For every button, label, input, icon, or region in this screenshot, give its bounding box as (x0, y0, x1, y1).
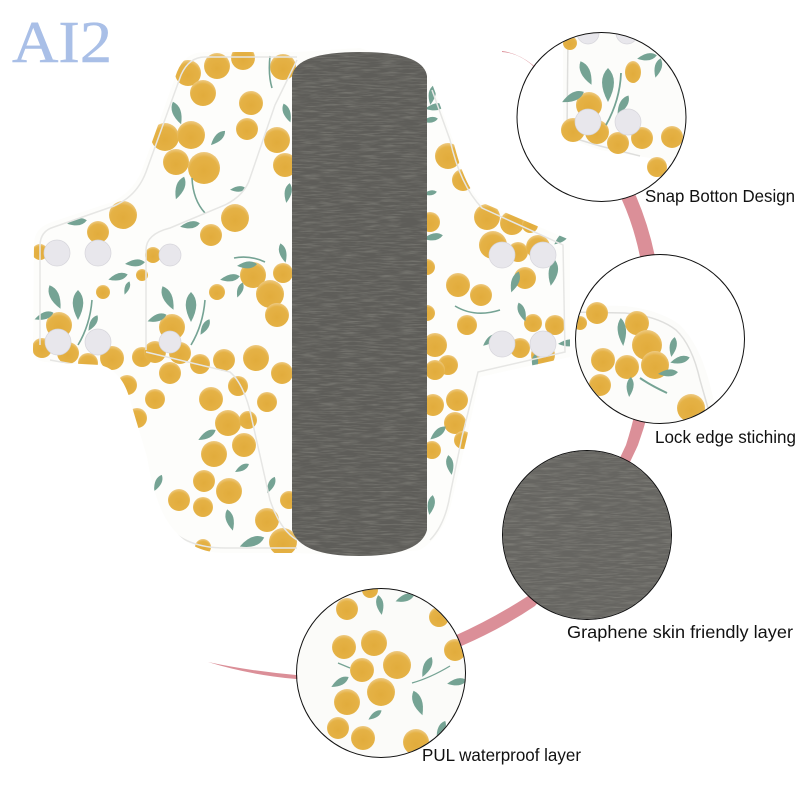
snap buttons (44, 240, 556, 357)
detail circle: snap button design (516, 32, 686, 202)
orange fruit print (32, 46, 565, 556)
detail circle: graphene layer (502, 450, 673, 621)
label: graphene layer: Graphene skin friendly layer (567, 622, 793, 642)
green leaf print (33, 85, 578, 551)
pink arc connecting the detail circles (208, 51, 661, 679)
label: lock edge stitching: Lock edge stiching (655, 427, 796, 447)
label: snap button design: Snap Botton Design (645, 186, 795, 206)
sanitary pad product (30, 45, 578, 560)
second folded pad overlap stitching (146, 60, 297, 540)
detail circle: PUL waterproof layer (296, 582, 467, 758)
detail circle: lock edge stitching (570, 254, 744, 425)
watermark logo AI2: AI2 (12, 9, 112, 75)
graphene grey centre layer (292, 52, 427, 556)
edge stitching line (40, 57, 565, 548)
print stems (78, 56, 500, 345)
pad printed fabric body (30, 45, 578, 560)
label: PUL waterproof layer: PUL waterproof layer (422, 745, 581, 765)
